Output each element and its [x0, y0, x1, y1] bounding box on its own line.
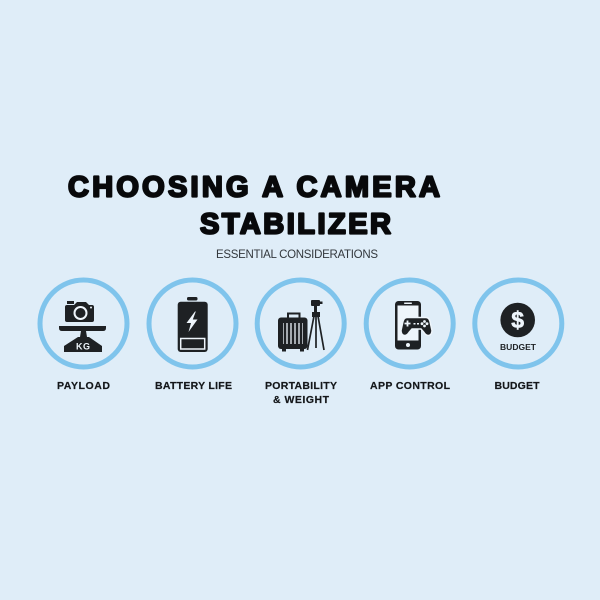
battery label: BATTERY LIFE [155, 380, 232, 392]
title: STABILIZER [200, 208, 391, 240]
subtitle: ESSENTIAL CONSIDERATIONS [216, 249, 378, 261]
icon: suitcase [278, 314, 308, 352]
icon: tripod [308, 300, 324, 350]
budget label: BUDGET [494, 380, 540, 392]
title [68, 172, 440, 240]
panel: portability and weight: & WEIGHT [273, 394, 330, 406]
icon: battery [178, 297, 208, 352]
icon: dollar coin: $ [511, 307, 524, 333]
portability ring [257, 280, 344, 367]
battery ring [149, 280, 236, 367]
budget ring [475, 280, 562, 367]
panel: battery life [149, 280, 236, 392]
panel: portability and weight [257, 280, 344, 406]
app control ring [366, 280, 453, 367]
icon: phone with gamepad [395, 301, 432, 350]
portability label: PORTABILITY [265, 380, 337, 392]
panel: app control [366, 280, 453, 392]
icon: camera on scale: KG [76, 342, 90, 352]
payload label: PAYLOAD [57, 380, 110, 392]
app control label: APP CONTROL [370, 380, 451, 392]
panel: payload [40, 280, 127, 392]
icon: dollar coin: BUDGET [500, 342, 537, 352]
payload ring [40, 280, 127, 367]
icon: dollar coin [500, 303, 537, 352]
title: CHOOSING A CAMERA [68, 172, 440, 204]
panel: budget [475, 280, 562, 392]
